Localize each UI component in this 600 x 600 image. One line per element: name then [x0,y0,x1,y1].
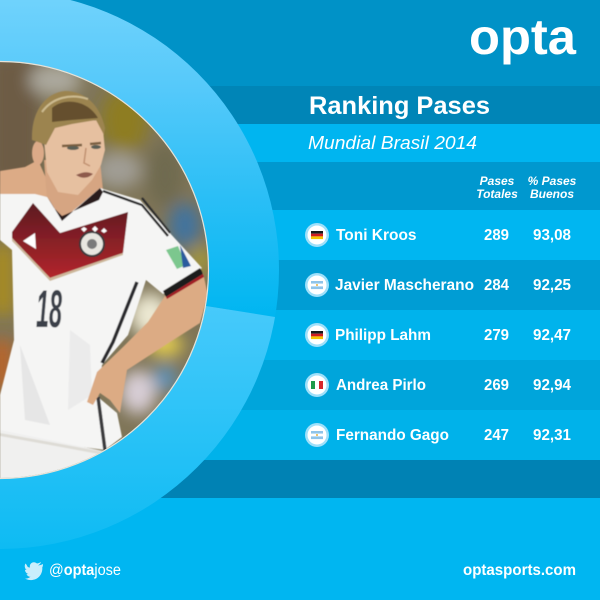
row: Philipp Lahm: 279 [484,327,509,344]
red chevron [12,203,128,278]
neck [44,160,103,222]
column header: % pases buenos [528,174,577,201]
hair [32,91,105,145]
website: optasports.com [463,562,576,579]
column header: % pases buenos: % Pases [528,174,577,188]
face [43,120,105,195]
icon: argentina flag [305,423,329,447]
opta logo: opta [469,9,577,65]
column header: pases totales [476,174,518,201]
twitter handle: @optajose [49,562,121,579]
shorts [0,436,104,478]
column header: pases totales: Totales [476,187,518,201]
ear [32,141,44,165]
row: Fernando Gago: 92,31 [533,427,571,444]
row: Fernando Gago: Fernando Gago [336,427,449,444]
forearm and hand [87,273,208,413]
row: Toni Kroos: 93,08 [533,227,571,244]
row: Andrea Pirlo: 92,94 [533,377,571,394]
photo circle outline [0,62,208,478]
far arm [0,160,48,197]
row: Toni Kroos: Toni Kroos [336,227,416,244]
title: Ranking Pases [309,92,490,120]
row: Javier Mascherano: 92,25 [533,277,571,294]
shoulder stripes [103,191,168,236]
row: Fernando Gago [305,423,571,447]
icon: argentina flag [305,273,329,297]
patch [166,246,186,269]
icon: germany flag [305,223,329,247]
crest [80,232,104,256]
row: Andrea Pirlo: 269 [484,377,509,394]
photo: player in circle [0,55,210,482]
icon: twitter bird [25,562,43,580]
icon: italy flag [305,373,329,397]
side stripes [102,282,137,363]
row: Javier Mascherano: Javier Mascherano [335,277,474,294]
row: Philipp Lahm: 92,47 [533,327,571,344]
adidas mark [23,233,36,249]
column header: pases totales: Pases [480,174,515,188]
row: Philipp Lahm [305,323,571,347]
circular ring behind photo [0,0,279,549]
jersey [0,188,202,450]
row: Philipp Lahm: Philipp Lahm [335,327,431,344]
row: Andrea Pirlo [305,373,571,397]
icon: germany flag [305,323,329,347]
photo: player in circle: 18 [36,280,62,339]
row: Javier Mascherano: 284 [484,277,509,294]
row: Fernando Gago: 247 [484,427,509,444]
row: Toni Kroos [305,223,571,247]
nose and mouth [84,148,90,166]
collar [48,188,103,221]
row: Toni Kroos: 289 [484,227,509,244]
subtitle: Mundial Brasil 2014 [308,132,477,153]
row: Andrea Pirlo: Andrea Pirlo [336,377,426,394]
row: Javier Mascherano [305,273,571,297]
cuff [163,268,203,297]
column header: % pases buenos: Buenos [530,187,574,201]
brow and eyes [62,143,101,146]
